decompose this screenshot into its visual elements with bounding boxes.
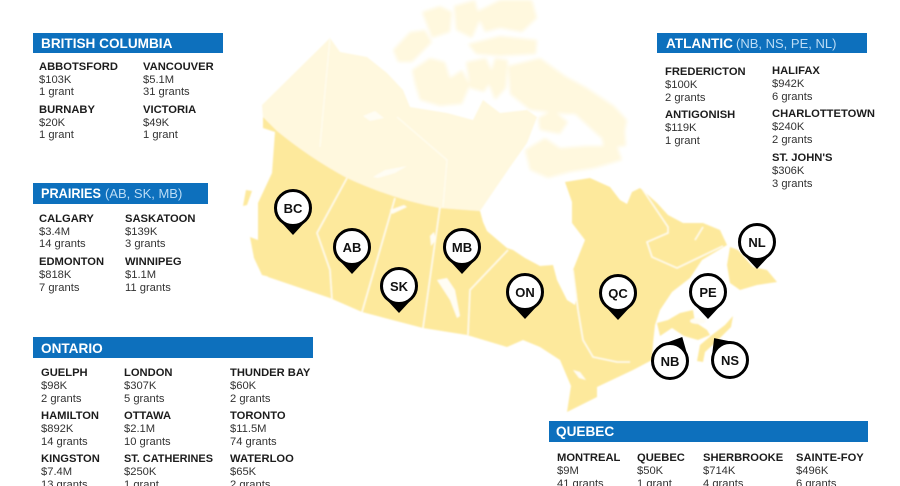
heading: Atlantic: ATLANTIC (666, 36, 733, 51)
city: Saskatoon: $139K (125, 226, 158, 238)
pin: AB (334, 230, 370, 274)
city: Burnaby: BURNABY (39, 104, 95, 116)
city: Calgary: 14 grants (39, 238, 86, 250)
city: Fredericton (665, 66, 746, 104)
heading: Ontario: ONTARIO (41, 341, 103, 356)
heading: Atlantic: (NB, NS, PE, NL) (736, 36, 836, 51)
city: Halifax (772, 65, 820, 103)
pin: BC: BC (284, 201, 303, 216)
city: Antigonish: ANTIGONISH (665, 109, 735, 121)
panel: British Columbia (33, 33, 223, 141)
city: St. John's (772, 152, 833, 190)
pin: SK (382, 268, 416, 313)
city: Halifax: 6 grants (772, 91, 813, 103)
heading: Atlantic (657, 33, 867, 53)
city: Winnipeg: 11 grants (125, 282, 171, 294)
city: Victoria: VICTORIA (143, 104, 196, 116)
city: Vancouver: 31 grants (143, 86, 190, 98)
city: Kingston: KINGSTON (41, 453, 100, 465)
heading: Quebec (549, 421, 868, 442)
city: Charlottetown (772, 108, 875, 146)
southern provinces (243, 117, 777, 412)
city: St. Catherines: ST. CATHERINES (124, 453, 214, 465)
panel: Ontario (33, 337, 313, 486)
heading: British Columbia: BRITISH COLUMBIA (41, 36, 173, 51)
panel: Atlantic (657, 33, 875, 190)
city: Victoria (143, 104, 196, 141)
city: St. John's: 3 grants (772, 178, 813, 190)
city: Burnaby: $20K (39, 117, 66, 129)
city: Edmonton (39, 256, 104, 294)
city: Toronto: $11.5M (230, 423, 266, 435)
city: Sainte-Foy: $496K (796, 465, 829, 477)
city: Winnipeg: WINNIPEG (125, 256, 182, 268)
pin: ON (508, 274, 542, 319)
map of Canada (243, 0, 777, 412)
pin: NL: NL (748, 235, 766, 250)
city: Toronto: 74 grants (230, 436, 277, 448)
arctic islands (393, 0, 627, 178)
city: Winnipeg: $1.1M (125, 269, 156, 281)
city: Vancouver: VANCOUVER (143, 61, 214, 73)
pin: NL (740, 224, 774, 269)
city: Saskatoon (125, 213, 195, 250)
city: Abbotsford: ABBOTSFORD (39, 61, 118, 73)
city: Edmonton: $818K (39, 269, 72, 281)
panel: Prairies (33, 183, 208, 294)
city: St. John's: $306K (772, 165, 805, 177)
pin: NS (704, 331, 748, 378)
city: Kingston (41, 453, 100, 486)
pin: QC (600, 276, 636, 320)
pin: PE (690, 274, 726, 319)
city: Saskatoon: SASKATOON (125, 213, 195, 225)
city: Thunder Bay (230, 367, 311, 405)
city: Thunder Bay: $60K (230, 380, 257, 392)
city: St. Catherines (124, 453, 214, 486)
city: Sherbrooke: $714K (703, 465, 736, 477)
city: Hamilton: 14 grants (41, 436, 88, 448)
city: Charlottetown: 2 grants (772, 134, 813, 146)
city: London (124, 367, 172, 405)
city: Ottawa: OTTAWA (124, 410, 171, 422)
pin: QC: QC (608, 286, 628, 301)
city: Victoria: 1 grant (143, 129, 179, 141)
city: Waterloo: WATERLOO (230, 453, 294, 465)
city: St. Catherines: $250K (124, 466, 157, 478)
city: Winnipeg (125, 256, 182, 294)
province borders and lakes (317, 38, 723, 362)
heading: Quebec: QUEBEC (556, 424, 614, 439)
city: Sherbrooke: SHERBROOKE (703, 452, 784, 464)
pin: NS: NS (721, 353, 739, 368)
city: Guelph: $98K (41, 380, 68, 392)
city: Antigonish: $119K (665, 122, 697, 134)
city: Abbotsford: 1 grant (39, 86, 75, 98)
pin: NB (652, 331, 694, 378)
city: Hamilton: $892K (41, 423, 74, 435)
pin: ON: ON (515, 285, 535, 300)
city: Guelph: GUELPH (41, 367, 88, 379)
city: Guelph: 2 grants (41, 393, 82, 405)
city: Abbotsford: $103K (39, 74, 72, 86)
city: Halifax: $942K (772, 78, 805, 90)
northern mainland (262, 38, 537, 211)
city: Hamilton (41, 410, 99, 448)
city: Edmonton: EDMONTON (39, 256, 104, 268)
pin: SK: SK (390, 279, 409, 294)
city: Quebec: $50K (637, 465, 664, 477)
city: Waterloo: $65K (230, 466, 257, 478)
city: Waterloo (230, 453, 294, 486)
city: Edmonton: 7 grants (39, 282, 80, 294)
city: Victoria: $49K (143, 117, 170, 129)
city: Montreal (557, 452, 621, 486)
city: Guelph (41, 367, 88, 405)
city: Fredericton: 2 grants (665, 92, 706, 104)
city: London: LONDON (124, 367, 172, 379)
city: St. John's: ST. JOHN'S (772, 152, 833, 164)
pin: NB: NB (661, 354, 679, 369)
city: Kingston: $7.4M (41, 466, 72, 478)
city: Charlottetown: $240K (772, 121, 805, 133)
city: Burnaby: 1 grant (39, 129, 75, 141)
panel: Quebec (549, 421, 868, 486)
city: Calgary (39, 213, 94, 250)
heading: Prairies: PRAIRIES (41, 186, 101, 201)
city: London: 5 grants (124, 393, 165, 405)
city: Ottawa: $2.1M (124, 423, 155, 435)
city: Thunder Bay: THUNDER BAY (230, 367, 311, 379)
city: Ottawa: 10 grants (124, 436, 171, 448)
city: Toronto: TORONTO (230, 410, 286, 422)
pin: MB: MB (452, 240, 472, 255)
city: Toronto (230, 410, 286, 448)
city: Fredericton: FREDERICTON (665, 66, 746, 78)
city: Charlottetown: CHARLOTTETOWN (772, 108, 875, 120)
heading: British Columbia (33, 33, 223, 53)
city: Fredericton: $100K (665, 79, 698, 91)
city: Vancouver: $5.1M (143, 74, 174, 86)
pin: PE: PE (699, 285, 717, 300)
pin: MB (444, 230, 480, 274)
city: Montreal: MONTREAL (557, 452, 621, 464)
city: Thunder Bay: 2 grants (230, 393, 271, 405)
city: Saskatoon: 3 grants (125, 238, 166, 250)
city: London: $307K (124, 380, 157, 392)
heading: Prairies: (AB, SK, MB) (105, 186, 182, 201)
heading: Prairies (33, 183, 208, 204)
city: Ottawa (124, 410, 171, 448)
city: Calgary: $3.4M (39, 226, 70, 238)
city: Abbotsford (39, 61, 118, 98)
pin: BC (276, 190, 310, 235)
pin: AB: AB (343, 240, 361, 255)
city: Sainte-Foy (796, 452, 864, 486)
city: Hamilton: HAMILTON (41, 410, 99, 422)
city: Burnaby (39, 104, 95, 141)
city: Antigonish: 1 grant (665, 135, 701, 147)
heading: Ontario (33, 337, 313, 358)
city: Quebec: QUEBEC (637, 452, 685, 464)
city: Halifax: HALIFAX (772, 65, 820, 77)
city: Calgary: CALGARY (39, 213, 94, 225)
city: Vancouver (143, 61, 214, 98)
city: Quebec (637, 452, 685, 486)
city: Sainte-Foy: SAINTE-FOY (796, 452, 864, 464)
city: Montreal: $9M (557, 465, 579, 477)
city: Antigonish (665, 109, 735, 147)
city: Sherbrooke (703, 452, 784, 486)
